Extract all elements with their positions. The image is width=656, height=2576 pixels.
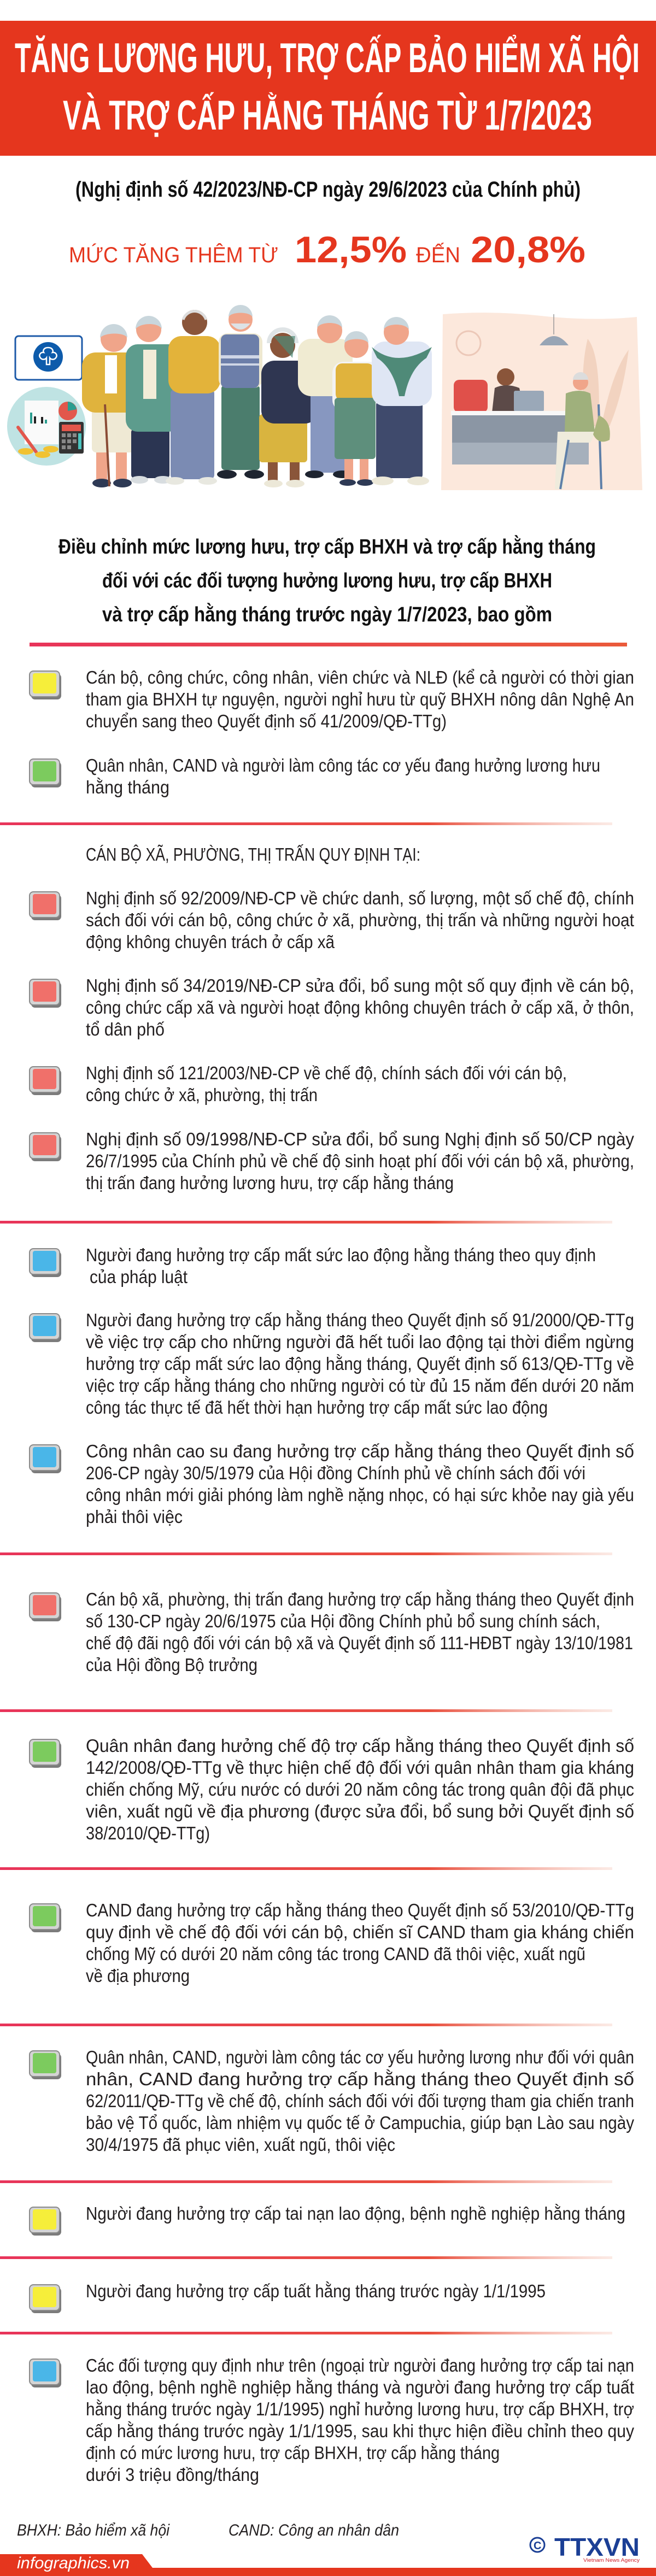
item: mất sức lao động — [30, 1245, 596, 1287]
section heading: cán bộ xã: CÁN BỘ XÃ, PHƯỜNG, THỊ TRẤN QUY ĐỊNH TẠI: — [86, 844, 420, 864]
icon: blue square — [30, 1314, 61, 1342]
item: QĐ 53/2010: chống Mỹ có dưới 20 năm công tác trong CAND đã thôi việc, xuất ngũ — [86, 1944, 585, 1964]
icon: green square — [30, 1904, 61, 1932]
icon: green square — [30, 1739, 61, 1768]
footer bar — [0, 2554, 656, 2576]
item: quân nhân CAND lương hưu: hằng tháng — [86, 777, 169, 797]
item: QĐ 142/2008: viên, xuất ngũ về địa phương (được sửa đổi, bổ sung bởi Quyết định số — [86, 1801, 634, 1821]
icon: BHXH logo box — [15, 336, 82, 380]
abbreviation notes: BHXH: Bảo hiểm xã hội — [17, 2521, 170, 2539]
item: quân nhân CAND lương hưu — [30, 755, 600, 797]
item: NĐ 92/2009 — [30, 888, 634, 952]
icon: blue square — [30, 1445, 61, 1473]
increase rate line: 12,5% — [295, 229, 407, 270]
abbreviation notes: CAND: Công an nhân dân — [229, 2521, 399, 2539]
item: NĐ 121/2003: Nghị định số 121/2003/NĐ-CP về chế độ, chính sách đối với cán bộ, — [86, 1063, 567, 1083]
people group — [82, 305, 432, 487]
item: dưới 3 triệu: định có mức lương hưu, trợ cấp BHXH, trợ cấp hằng tháng — [86, 2443, 500, 2463]
item: NĐ 34/2019: tổ dân phố — [86, 1019, 165, 1039]
logo: TTXVN: C — [534, 2540, 541, 2552]
item: công nhân cao su: phải thôi việc — [86, 1507, 183, 1527]
icon: yellow square — [30, 2285, 61, 2313]
item: NĐ 34/2019 — [30, 975, 634, 1039]
item: trợ cấp tuất: Người đang hưởng trợ cấp tuất hằng tháng trước ngày 1/1/1995 — [86, 2281, 546, 2301]
item: dưới 3 triệu — [30, 2355, 634, 2485]
person 5 — [259, 330, 318, 487]
item: QĐ 53/2010 — [30, 1900, 634, 1986]
abbreviation notes — [17, 2521, 399, 2539]
item: NĐ 92/2009: động không chuyên trách ở cấp xã — [86, 932, 335, 952]
item: NĐ 09/1998: thị trấn đang hưởng lương hưu, trợ cấp hằng tháng — [86, 1173, 454, 1193]
item: trợ cấp tuất — [30, 2281, 546, 2313]
icon: red square — [30, 1593, 61, 1621]
intro heading: và trợ cấp hằng tháng trước ngày 1/7/2023, bao gồm — [102, 602, 552, 626]
item: QĐ 62/2011: 30/4/1975 đã phục viên, xuất ngũ, thôi việc — [86, 2134, 395, 2155]
footer bar: infographics.vn — [17, 2554, 130, 2572]
person 6 — [298, 315, 353, 478]
item: QĐ 62/2011: nhân, CAND đang hưởng trợ cấp hằng tháng theo Quyết định số — [86, 2069, 634, 2089]
logo: TTXVN: Vietnam News Agency — [583, 2557, 640, 2563]
item: QĐ 91/2000: về việc trợ cấp cho những người đã hết tuổi lao động tại thời điểm ngừng — [86, 1332, 634, 1352]
person 7 — [332, 331, 380, 486]
icon: yellow square — [30, 671, 61, 699]
icon: green square — [30, 759, 61, 787]
item: QĐ 62/2011 — [30, 2047, 634, 2155]
item: dưới 3 triệu: dưới 3 triệu đồng/tháng — [86, 2465, 259, 2485]
item: QĐ 91/2000: công tác thực tế đã hết thời hạn hưởng trợ cấp mất sức lao động — [86, 1397, 548, 1418]
icon: finance circle — [7, 387, 86, 466]
item: QĐ 130-CP: của Hội đồng Bộ trưởng — [86, 1655, 257, 1675]
increase rate line: ĐẾN — [416, 242, 460, 267]
item: QĐ 91/2000 — [30, 1310, 634, 1418]
icon: blue square — [30, 1249, 61, 1277]
icon: red square — [30, 1067, 61, 1095]
person 2 — [126, 316, 180, 484]
person 1 — [82, 324, 141, 487]
item: tai nạn lao động — [30, 2203, 625, 2236]
person 8 — [372, 317, 432, 485]
item: QĐ 142/2008: Quân nhân đang hưởng chế độ trợ cấp hằng tháng theo Quyết định số — [86, 1736, 634, 1756]
item: QĐ 142/2008: 142/2008/QĐ-TTg về thực hiện chế độ đối với quân nhân tham gia kháng — [86, 1757, 634, 1778]
item: công nhân cao su: 206-CP ngày 30/5/1979 của Hội đồng Chính phủ về chính sách đối với — [86, 1463, 585, 1483]
item: QĐ 53/2010: quy định về chế độ đối với cán bộ, chiến sĩ CAND tham gia kháng chiến — [86, 1922, 634, 1942]
item: mất sức lao động: của pháp luật — [90, 1267, 188, 1287]
item: QĐ 130-CP — [30, 1589, 634, 1675]
item: QĐ 142/2008 — [30, 1736, 634, 1843]
office scene — [441, 313, 642, 490]
item: NĐ 121/2003: công chức ở xã, phường, thị trấn — [86, 1085, 318, 1105]
item: mất sức lao động: Người đang hưởng trợ cấp mất sức lao động hằng tháng theo quy định — [86, 1245, 596, 1265]
item: NĐ 09/1998 — [30, 1129, 634, 1193]
item: QĐ 53/2010: về địa phương — [86, 1966, 190, 1986]
increase rate line — [69, 229, 585, 270]
icon: red square — [30, 1133, 61, 1161]
item: QĐ 130-CP: số 130-CP ngày 20/6/1975 của Hội đồng Chính phủ bổ sung chính sách, — [86, 1611, 600, 1631]
person 4 — [217, 305, 264, 479]
intro heading: đối với các đối tượng hưởng lương hưu, trợ cấp BHXH — [102, 569, 552, 592]
item: NĐ 121/2003 — [30, 1063, 567, 1105]
illustration — [7, 305, 642, 490]
item: QĐ 142/2008: 38/2010/QĐ-TTg) — [86, 1823, 210, 1843]
item: cán bộ công chức — [30, 667, 634, 731]
icon: red square — [30, 979, 61, 1008]
logo: TTXVN: TTXVN — [554, 2533, 640, 2561]
icon: blue square — [30, 2359, 61, 2387]
item: cán bộ công chức: chuyển sang theo Quyết định số 41/2009/QĐ-TTg) — [86, 711, 447, 731]
icon: green square — [30, 2051, 61, 2079]
person 3 — [166, 310, 220, 485]
title banner — [0, 21, 656, 156]
increase rate line: MỨC TĂNG THÊM TỪ — [69, 243, 278, 267]
item: công nhân cao su: Công nhân cao su đang hưởng trợ cấp hằng tháng theo Quyết định số — [86, 1441, 634, 1461]
item: công nhân cao su — [30, 1441, 634, 1527]
item: NĐ 09/1998: Nghị định số 09/1998/NĐ-CP sửa đổi, bổ sung Nghị định số 50/CP ngày — [86, 1129, 634, 1149]
icon: yellow square — [30, 2207, 61, 2236]
icon: red square — [30, 892, 61, 920]
increase rate line: 20,8% — [471, 229, 585, 270]
intro heading — [58, 534, 596, 626]
